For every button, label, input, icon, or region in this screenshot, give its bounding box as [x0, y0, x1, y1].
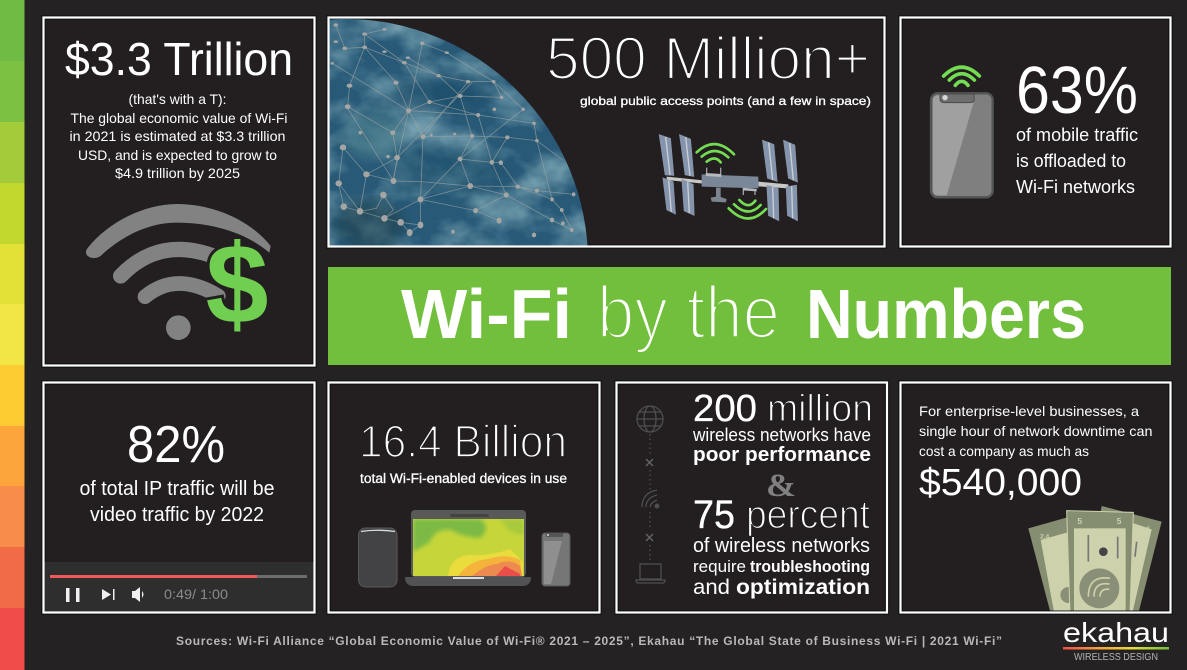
text block: downtime description: For enterprise-level businesses, a [919, 403, 1139, 419]
panel: mobile traffic [900, 18, 1170, 246]
text block: economic value description [70, 91, 288, 181]
colour gradient strip [0, 0, 24, 670]
panel: video traffic [44, 382, 314, 612]
icon: money bills: 5 [1077, 516, 1082, 526]
panel: wifi-enabled devices [328, 382, 600, 612]
logo: ekahau wireless design: WIRELESS DESIGN [1074, 651, 1158, 663]
stat: 63%: 63% [1016, 53, 1138, 128]
icon: volume [132, 587, 144, 602]
title: Wi-Fi by the Numbers [401, 271, 1086, 354]
text block: economic value description: in 2021 is estimated at $3.3 trillion [70, 128, 286, 144]
text block: downtime description [919, 403, 1152, 459]
text block: troubleshooting and optimization: optimization [736, 576, 870, 599]
icon: wifi with dollar sign: $ [206, 221, 268, 347]
text block: economic value description: The global economic value of Wi-Fi [70, 110, 288, 126]
text block: video traffic description: video traffic by 2022 [90, 504, 264, 526]
text block: poor performance: poor performance [693, 444, 871, 466]
image: earth with connected network [330, 19, 588, 246]
stat: 200 million [693, 388, 873, 430]
icons: globe to laptop connection [636, 406, 665, 583]
text block: poor performance [692, 425, 871, 466]
time code: 0:49/ 1:00 [164, 586, 228, 602]
text block: mobile traffic description: of mobile traffic [1016, 125, 1138, 145]
text block: mobile traffic description [1016, 125, 1138, 197]
icon: next [102, 589, 114, 600]
text block: troubleshooting and optimization: require [693, 557, 746, 576]
icon: wifi with dollar sign [86, 204, 271, 347]
stat: 16.4 Billion: 16.4 Billion [359, 416, 567, 467]
text block: video traffic description [80, 478, 274, 526]
text block: troubleshooting and optimization: of wireless networks [693, 535, 870, 557]
logo: ekahau wireless design [1063, 617, 1169, 663]
logo: ekahau wireless design: ekahau [1063, 617, 1169, 648]
text block: economic value description: USD, and is expected to grow to [78, 147, 277, 163]
text block: troubleshooting and optimization: and [693, 576, 730, 599]
text block: economic value description: (that's with a T): [128, 91, 226, 107]
title: Wi-Fi by the Numbers: Numbers [806, 275, 1086, 353]
video player bar [44, 562, 314, 612]
text block: mobile traffic description: is offloaded to [1016, 151, 1126, 171]
title: Wi-Fi by the Numbers: Wi-Fi [401, 275, 572, 353]
panel: network performance [616, 382, 887, 612]
text block: downtime description: cost a company as much as [919, 443, 1089, 459]
icon: money bills [1028, 506, 1162, 613]
panel: global economic value [44, 18, 314, 366]
icon: money bills: 6 [1146, 525, 1150, 534]
icon: router [358, 528, 397, 587]
text block: downtime description: single hour of network downtime can [919, 423, 1152, 439]
stat: 75 percent [693, 493, 870, 537]
stat: $540,000: $540,000 [919, 462, 1082, 504]
icon: phone [542, 533, 570, 586]
stat: 200 million: 200 [693, 388, 757, 430]
text block: troubleshooting and optimization [693, 535, 870, 599]
title banner [328, 267, 1171, 365]
heading: $3.3 Trillion: $3.3 Trillion [65, 33, 293, 85]
text block: video traffic description: of total IP traffic will be [80, 478, 274, 500]
panel: downtime cost [900, 382, 1170, 613]
heading: 500 Million+: 500 Million+ [546, 25, 870, 92]
icon: pause [66, 588, 80, 602]
ampersand: & [766, 468, 796, 504]
icon: laptop with heatmap [405, 510, 531, 586]
text block: troubleshooting and optimization: troubleshooting [750, 557, 870, 576]
stat: 200 million: million [767, 388, 873, 430]
stat: 75 percent: 75 [693, 493, 735, 537]
icon: space station with wifi [659, 134, 798, 221]
sources footer: Sources: Wi-Fi Alliance “Global Economic Value of Wi-Fi® 2021 – 2025”, Ekahau “The Global State of Business Wi-Fi | 2021 Wi-Fi” [176, 634, 1002, 648]
text block: mobile traffic description: Wi-Fi networks [1016, 177, 1135, 197]
icon: money bills: 2.4 [1040, 533, 1050, 540]
caption: devices: total Wi-Fi-enabled devices in use [360, 471, 567, 486]
icon: money bills: 5 [1117, 516, 1122, 526]
panel: 500 million access points [326, 15, 887, 249]
stat: 82%: 82% [127, 416, 225, 474]
stat: 75 percent: percent [746, 493, 870, 537]
caption: access points: global public access points (and a few in space) [580, 94, 871, 108]
icon: phone with wifi [931, 67, 993, 197]
text block: economic value description: $4.9 trillion by 2025 [115, 165, 240, 181]
text block: poor performance: wireless networks have [692, 425, 871, 445]
title: Wi-Fi by the Numbers: by the [597, 271, 780, 354]
